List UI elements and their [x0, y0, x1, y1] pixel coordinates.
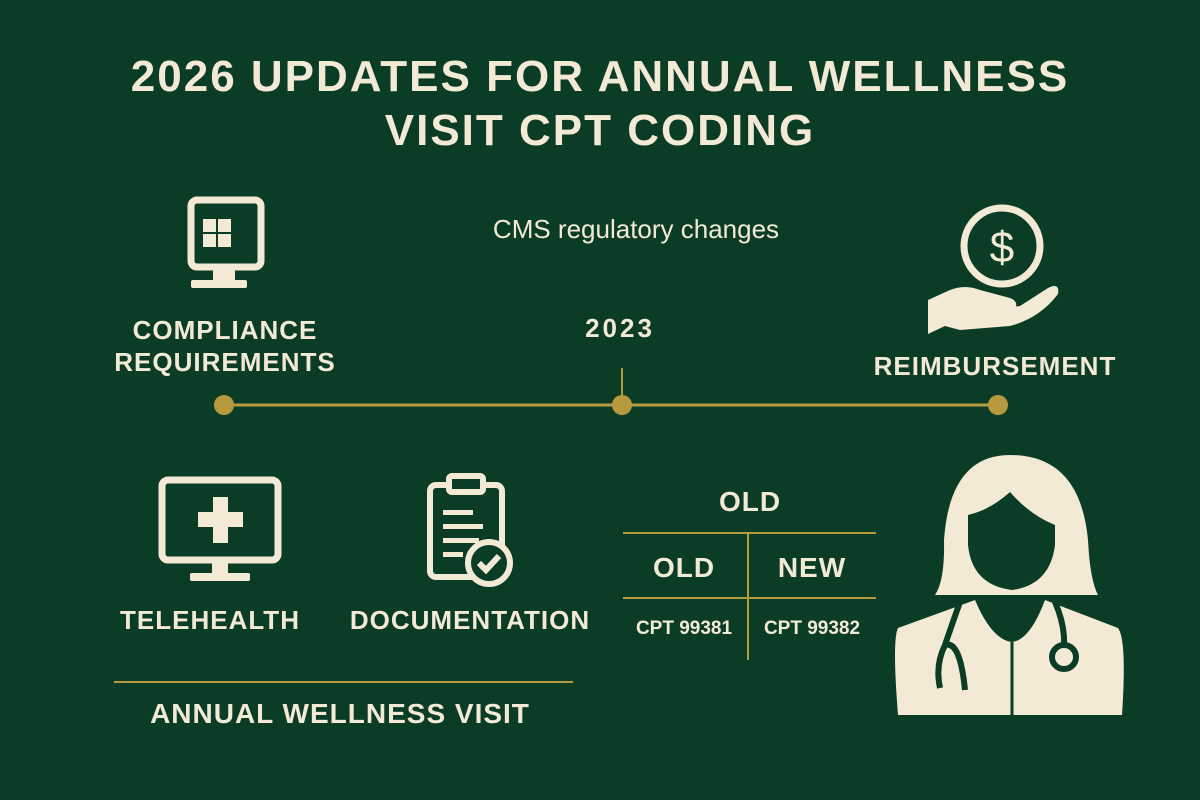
- title: [131, 52, 1069, 155]
- label: annual wellness visit: ANNUAL WELLNESS VISIT: [150, 698, 530, 729]
- table: old vs new codes: OLD: [653, 552, 715, 583]
- table: old vs new codes: NEW: [778, 552, 846, 583]
- title: 2026 UPDATES FOR ANNUAL WELLNESS: [131, 52, 1069, 101]
- label: compliance requirements: COMPLIANCE: [133, 315, 317, 345]
- icon: dollar coin in hand: [928, 208, 1058, 334]
- table: old vs new codes: CPT 99381: [636, 618, 732, 639]
- label: documentation: DOCUMENTATION: [350, 605, 590, 635]
- title: VISIT CPT CODING: [385, 106, 815, 155]
- icon: female doctor: [895, 455, 1124, 715]
- icon: dollar coin in hand: $: [990, 223, 1014, 272]
- divider under telehealth/documentation: [114, 681, 573, 683]
- table: old vs new codes: [623, 486, 876, 660]
- label: telehealth: TELEHEALTH: [120, 605, 300, 635]
- subtitle: CMS regulatory changes: CMS regulatory changes: [493, 214, 779, 244]
- year label 2023: 2023: [585, 313, 655, 343]
- timeline: [214, 368, 1008, 415]
- icon: computer with grid: [191, 200, 261, 288]
- label: compliance requirements: REQUIREMENTS: [114, 347, 336, 377]
- table: old vs new codes: OLD: [719, 486, 781, 517]
- icon: clipboard with check: [430, 476, 510, 584]
- label: compliance requirements: [114, 315, 336, 377]
- table: old vs new codes: CPT 99382: [764, 618, 860, 639]
- icon: telehealth monitor: [162, 480, 278, 581]
- label: reimbursement: REIMBURSEMENT: [874, 351, 1116, 381]
